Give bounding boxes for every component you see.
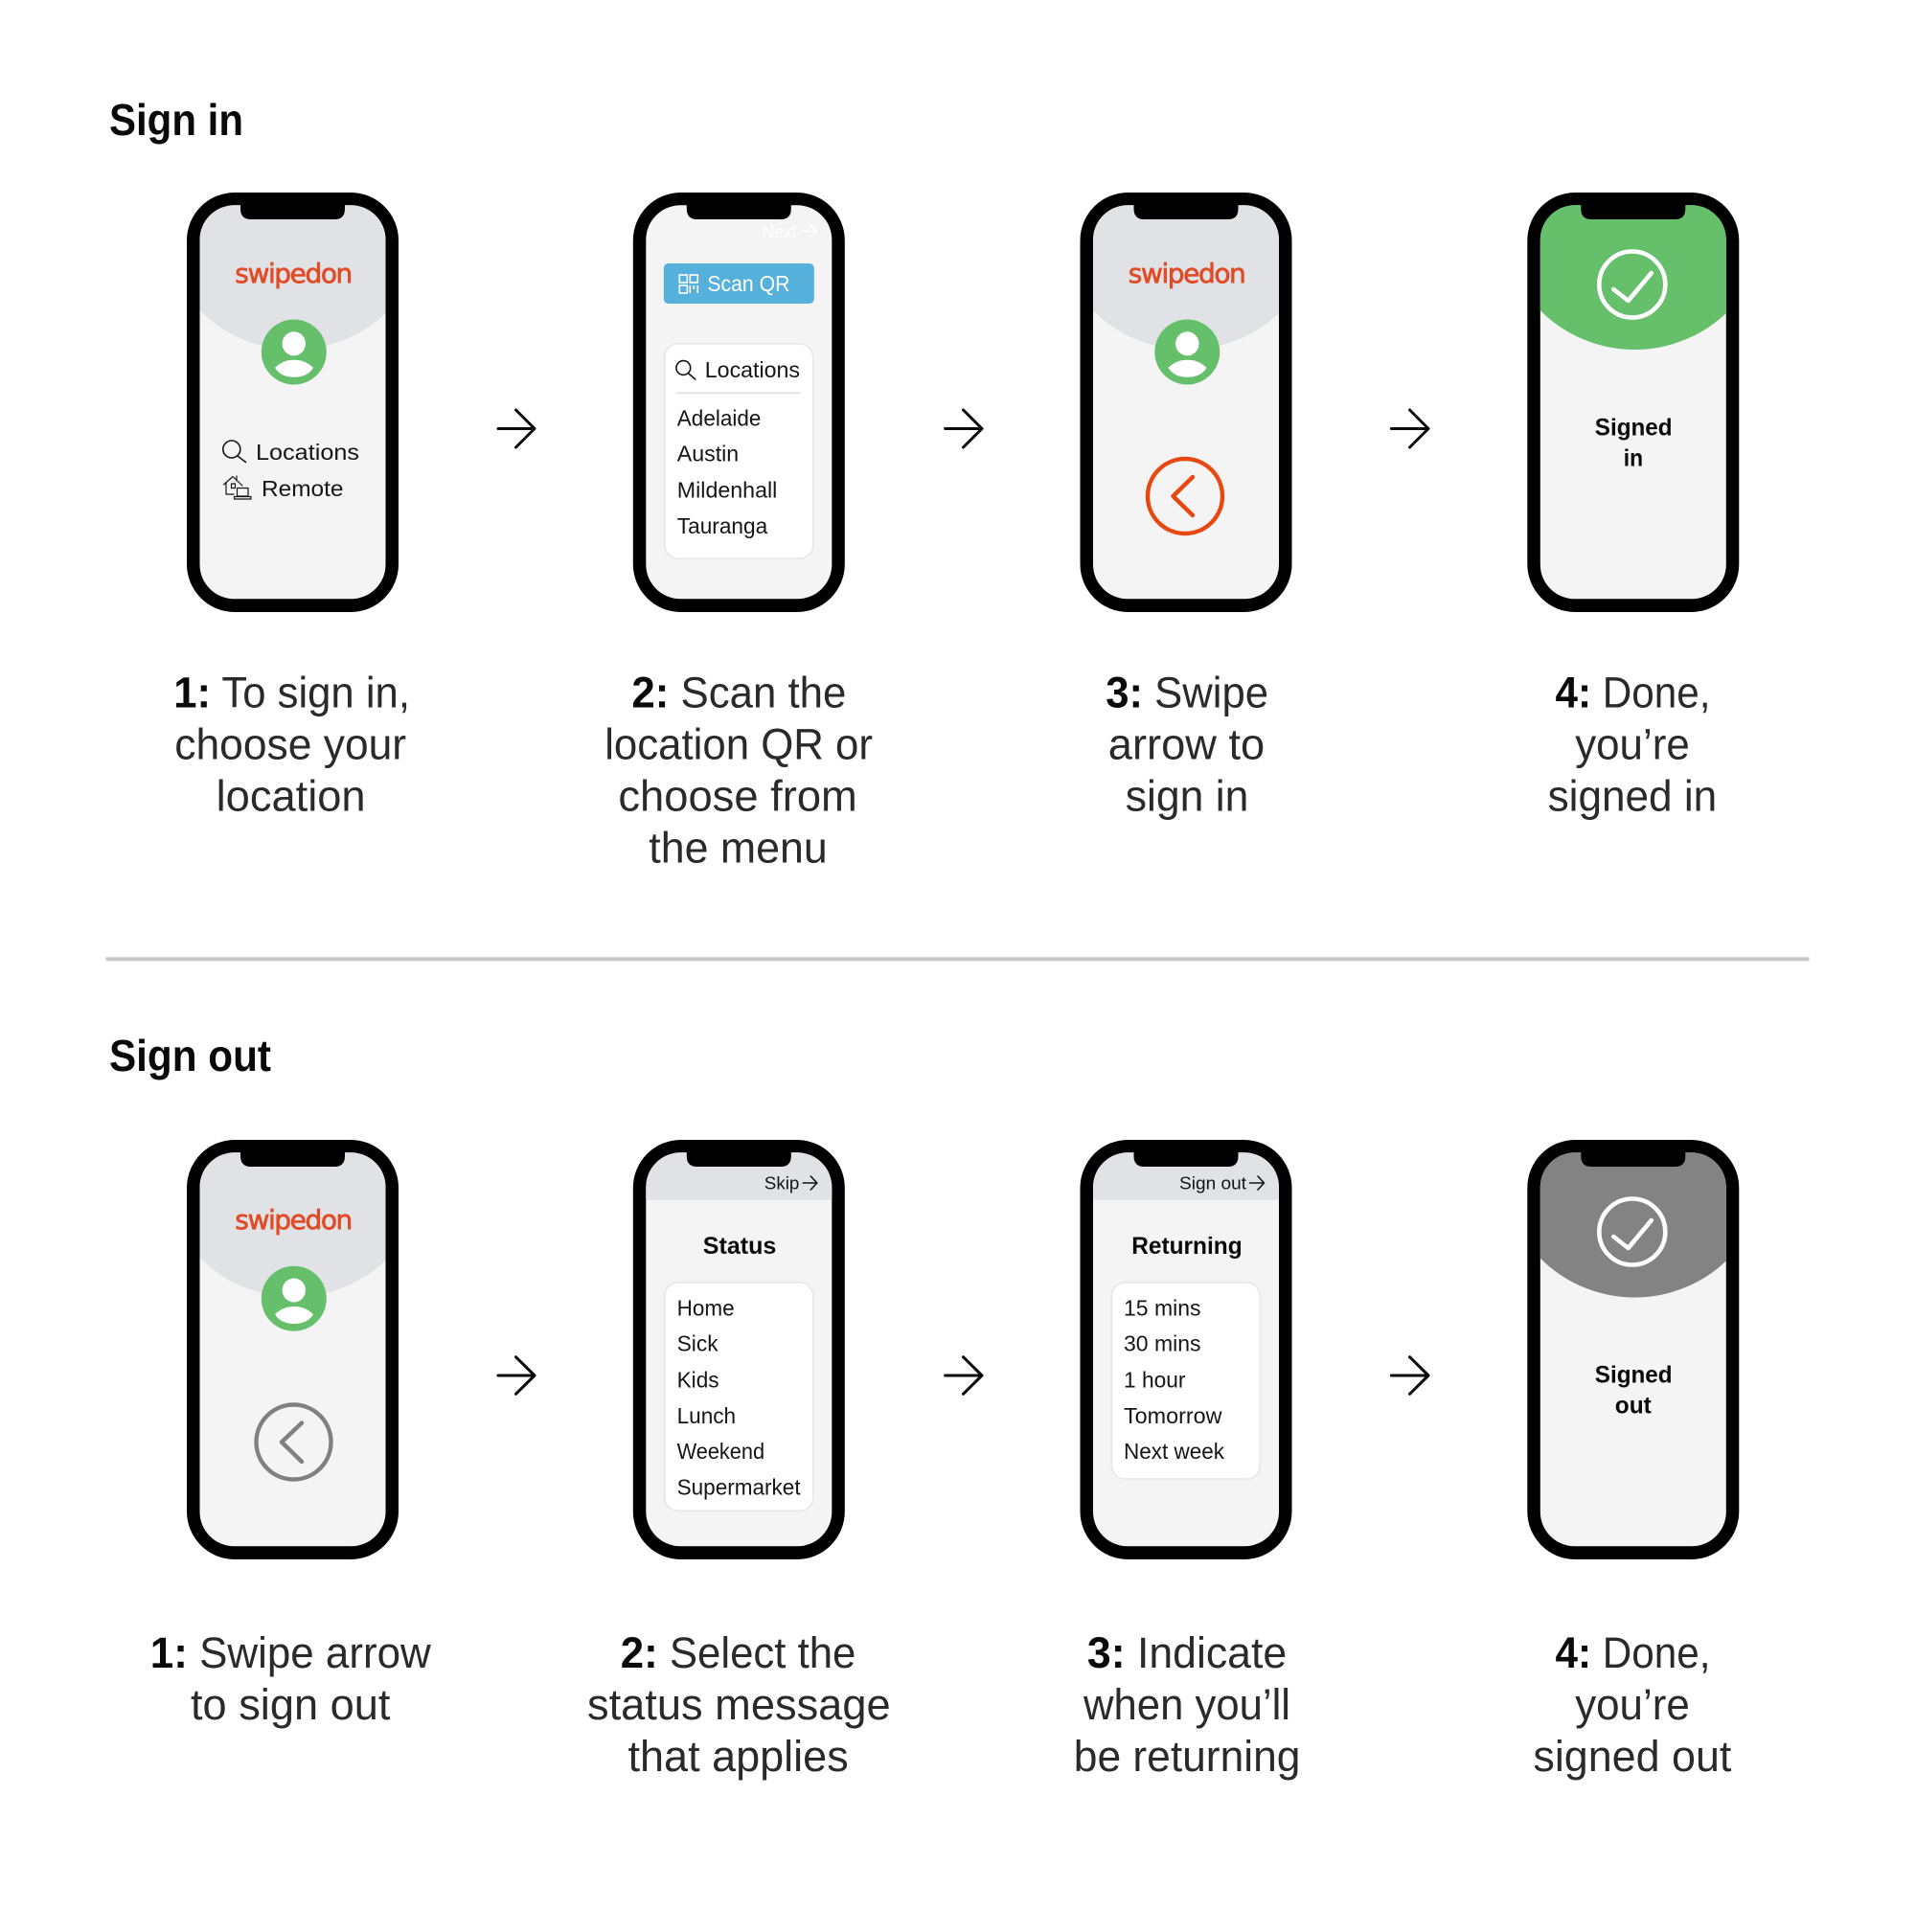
faint next link [763,221,817,241]
card: status list [665,1283,813,1511]
caption: sign out step 4: 4: Done, [1556,1628,1711,1677]
caption: sign in step 3 [1106,669,1268,820]
caption: sign in step 1: 1: To sign in, [173,669,410,716]
phone frame [1081,193,1291,612]
label: Locations: Locations [705,357,800,382]
label: Signed in: Signed [1595,414,1673,441]
card: locations list: Adelaide [677,405,761,430]
caption: sign in step 2: the menu [649,824,828,872]
icon: remote house and laptop [224,476,251,499]
label: Signed out [1595,1361,1673,1419]
arrow [498,410,535,447]
caption: sign out step 2: 2: Select the [621,1628,855,1677]
caption: sign in step 2 [604,669,873,872]
card: locations list: Mildenhall [677,477,777,502]
card: status list: Supermarket [677,1475,801,1500]
caption: sign out step 3: be returning [1074,1732,1300,1781]
arrow [1391,410,1428,447]
caption: sign out step 2: status message [587,1680,891,1729]
icon: QR code [679,275,697,293]
heading: Returning: Returning [1131,1233,1243,1260]
arrow [498,1357,535,1394]
link: Skip [764,1173,817,1193]
caption: sign out step 3 [1074,1628,1300,1781]
caption: sign out step 3: when you’ll [1083,1680,1290,1729]
card: locations list: Austin [677,442,739,466]
phone: sign in step 1 [187,193,399,612]
label: Signed in: in [1624,444,1643,471]
caption: sign out step 1: 1: Swipe arrow [150,1628,431,1677]
icon: search [223,441,245,462]
caption: sign in step 1 [173,669,410,820]
icon: user avatar [1154,320,1220,385]
caption: sign in step 4: you’re [1575,720,1690,768]
arrow [1391,1357,1428,1394]
caption: sign out step 4: signed out [1533,1732,1732,1781]
phone frame [633,193,845,612]
card: locations list [665,344,813,558]
caption: sign in step 3: sign in [1126,772,1248,820]
phone: sign out step 4 [1527,1140,1740,1559]
arrow [946,410,982,447]
caption: sign out step 2 [587,1628,891,1781]
caption: sign out step 1 [150,1628,431,1729]
icon: search [676,361,696,379]
phone frame [1527,193,1740,612]
card: locations list: Tauranga [677,513,767,538]
caption: sign in step 4 [1548,669,1717,820]
card: status list: Kids [677,1367,719,1392]
phone: sign out step 2 [633,1140,845,1559]
caption: sign out step 2: that applies [628,1732,849,1781]
phone: sign in step 4 [1527,193,1740,612]
heading: Sign in: Sign in [109,95,243,145]
card: status list: Home [677,1295,735,1320]
phone frame [633,1140,845,1559]
card: returning list: 30 mins [1124,1331,1201,1356]
logo: swipedon [235,1204,353,1236]
icon: swipe arrow button [1148,459,1222,534]
faint next link: Next [763,221,797,241]
caption: sign out step 4: you’re [1575,1680,1690,1729]
caption: sign in step 2: location QR or [604,720,873,768]
card: returning list: Tomorrow [1124,1403,1222,1428]
logo: swipedon [235,258,353,289]
phone frame [187,1140,399,1559]
icon: check mark [1599,1199,1665,1264]
card: status list: Lunch [677,1403,736,1428]
caption: sign in step 2: 2: Scan the [631,669,846,716]
button: Scan QR [664,263,814,304]
phone: sign in step 2 [633,193,845,612]
phone frame [187,193,399,612]
card: returning list: Next week [1124,1439,1224,1464]
icon: user avatar [262,1266,327,1331]
label: Signed in [1595,414,1673,471]
heading: Status: Status [703,1233,776,1260]
caption: sign in step 2: choose from [618,772,857,820]
label: Signed out: out [1615,1392,1652,1419]
card: status list: Weekend [677,1439,764,1464]
logo: swipedon [1129,258,1246,289]
link: Sign out: Sign out [1179,1173,1246,1193]
caption: sign in step 3: 3: Swipe [1106,669,1268,716]
card: returning list: 15 mins [1124,1295,1201,1320]
link: Skip: Skip [764,1173,799,1193]
phone: sign out step 1 [187,1140,399,1559]
icon: check mark [1599,251,1665,318]
caption: sign in step 3: arrow to [1108,720,1265,768]
icon: user avatar [262,320,327,385]
card: returning list [1111,1283,1260,1479]
arrow [946,1357,982,1394]
icon: swipe arrow button [257,1404,331,1479]
caption: sign out step 4 [1533,1628,1732,1781]
caption: sign in step 4: 4: Done, [1556,669,1711,716]
label: Locations: Locations [256,440,359,465]
caption: sign in step 4: signed in [1548,772,1717,820]
card: status list: Sick [677,1331,718,1356]
heading: Sign out: Sign out [109,1031,271,1080]
caption: sign out step 3: 3: Indicate [1087,1628,1287,1677]
phone frame [1081,1140,1291,1559]
phone: sign out step 3 [1081,1140,1291,1559]
phone frame [1527,1140,1740,1559]
caption: sign out step 1: to sign out [191,1680,391,1729]
label: Scan QR: Scan QR [707,271,789,296]
card: returning list: 1 hour [1124,1367,1186,1392]
caption: sign in step 1: location [217,772,366,820]
phone: sign in step 3 [1081,193,1291,612]
label: Remote: Remote [262,476,343,501]
label: Signed out: Signed [1595,1361,1673,1388]
caption: sign in step 1: choose your [174,720,406,768]
